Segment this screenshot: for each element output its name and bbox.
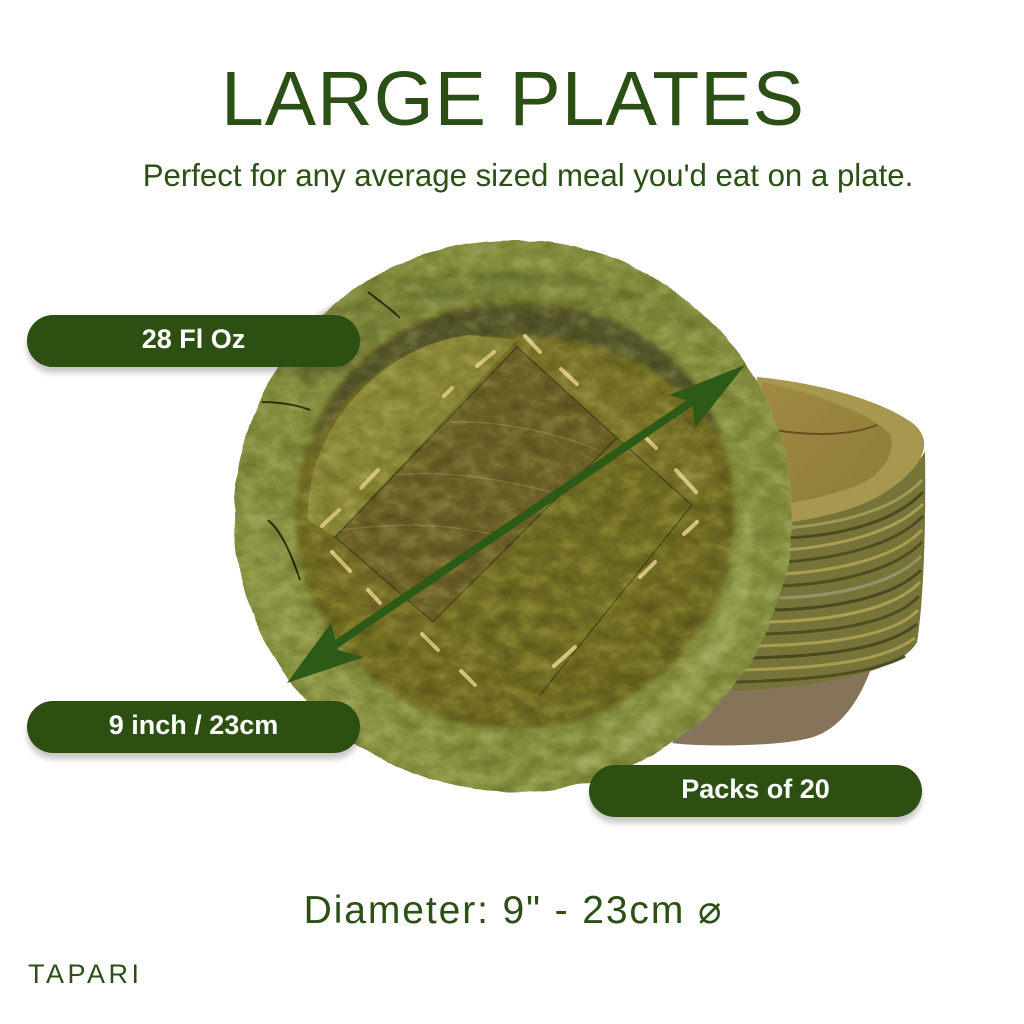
rim shading	[300, 268, 720, 400]
right leaf panel	[433, 438, 692, 695]
centre dark leaf panel	[335, 347, 617, 622]
top shadow crescent	[312, 304, 722, 450]
staples	[322, 336, 697, 685]
stack of plates	[672, 377, 925, 745]
callout: size	[27, 701, 360, 753]
front plate	[234, 240, 792, 792]
plate well	[295, 301, 735, 729]
top bowl	[745, 377, 924, 522]
plate rim	[234, 240, 792, 792]
subtitle: Perfect for any average sized meal you'd eat on a plate.	[143, 158, 913, 193]
stacked rims	[733, 452, 925, 691]
diameter caption: Diameter: 9" - 23cm ⌀	[304, 889, 723, 932]
left leaf panel	[308, 335, 517, 537]
callout: pack size: Packs of 20	[681, 774, 830, 804]
arrow: plate diameter	[287, 365, 745, 683]
callout: size: 9 inch / 23cm	[109, 710, 278, 740]
title: LARGE PLATES	[221, 56, 805, 142]
base of lowest bowl	[672, 666, 872, 745]
brand name: TAPARI	[28, 959, 143, 989]
callout: capacity	[27, 315, 360, 367]
callout: pack size	[589, 765, 922, 817]
callout: capacity: 28 Fl Oz	[142, 324, 245, 354]
fold lines and veins	[335, 347, 692, 695]
